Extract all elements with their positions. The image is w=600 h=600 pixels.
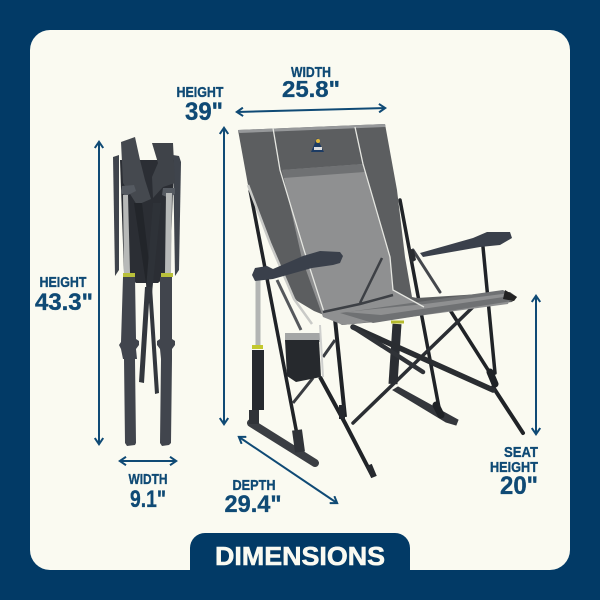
dimension: folded height: HEIGHT xyxy=(40,274,86,291)
dimension: chair height xyxy=(176,84,224,424)
dimension: folded height xyxy=(35,142,99,444)
front frame xyxy=(250,190,374,477)
dimension: depth: 29.4" xyxy=(224,491,282,518)
dimension: seat height: SEAT xyxy=(504,444,538,461)
folded chair xyxy=(113,137,181,446)
dimension: chair width: 25.8" xyxy=(282,76,340,102)
chair back and seat xyxy=(238,124,517,325)
folded legs xyxy=(119,277,175,446)
title tab xyxy=(190,533,410,571)
dimension: folded width xyxy=(120,461,176,513)
icon: brand logo xyxy=(311,138,324,152)
dimension: chair height: 39" xyxy=(185,98,223,126)
dimension: folded width: WIDTH xyxy=(128,471,168,488)
dimension: chair width xyxy=(237,64,385,112)
dimension: folded width: 9.1" xyxy=(130,486,166,513)
dimension: seat height xyxy=(490,296,538,500)
cup holder xyxy=(285,325,323,382)
dimension: depth: DEPTH xyxy=(232,477,276,494)
dimension: seat height: HEIGHT xyxy=(490,459,538,476)
dimension: seat height: 20" xyxy=(500,472,538,500)
title tab: DIMENSIONS xyxy=(215,541,385,571)
dimension: folded height: 43.3" xyxy=(35,289,93,316)
dimension: chair height: HEIGHT xyxy=(176,84,224,101)
rear legs and cross bars xyxy=(353,200,523,433)
dimension: chair width: WIDTH xyxy=(291,64,331,81)
front armrest xyxy=(252,251,343,281)
rear armrest xyxy=(420,232,512,257)
dimension: depth xyxy=(224,437,337,518)
